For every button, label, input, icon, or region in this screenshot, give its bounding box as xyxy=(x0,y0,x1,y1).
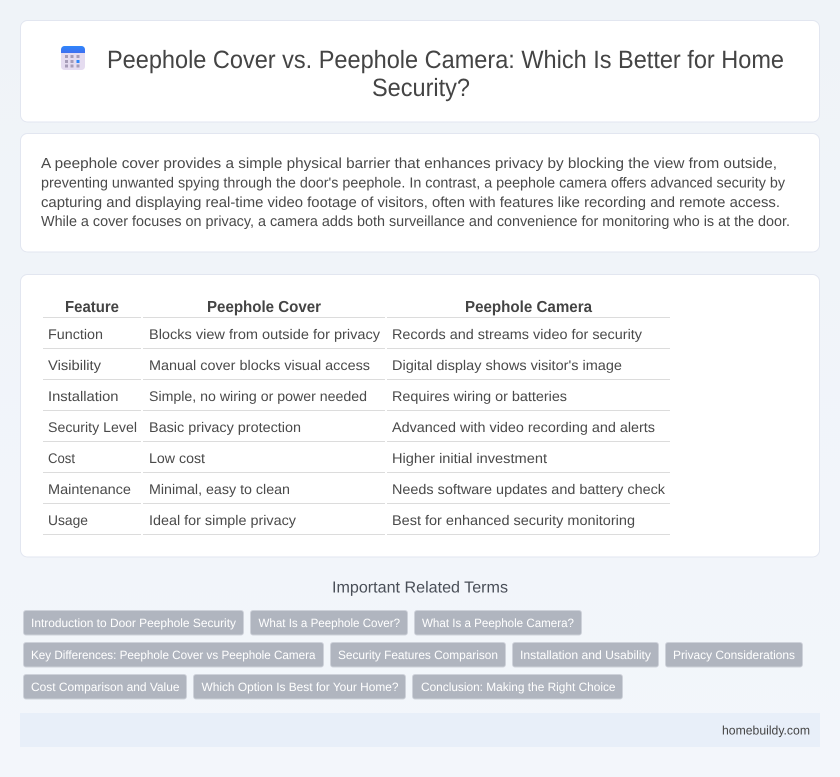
row: usage: Ideal for simple privacy xyxy=(149,512,296,528)
title xyxy=(107,46,784,102)
icon: calendar xyxy=(61,46,85,70)
panel: related term tags: Privacy Considerations xyxy=(673,648,795,662)
footer credit: homebuildy.com xyxy=(722,724,810,738)
panel: related term tags: Conclusion: Making the Right Choice xyxy=(421,680,616,694)
row: function: Blocks view from outside for privacy xyxy=(149,326,380,342)
panel: header xyxy=(20,20,820,122)
footer xyxy=(20,713,820,747)
panel: related term tags: What Is a Peephole Camera? xyxy=(422,616,574,630)
row: function xyxy=(48,326,642,342)
table header: Peephole Camera xyxy=(465,299,592,316)
text block: introduction: A peephole cover provides a simple physical barrier that enhances privacy by blocking the view from outside, xyxy=(41,156,777,172)
title: Peephole Cover vs. Peephole Camera: Which Is Better for Home xyxy=(107,46,784,74)
row: usage xyxy=(48,512,635,528)
row: usage: Usage xyxy=(48,512,88,528)
row: function: Function xyxy=(48,326,103,342)
row: cost: Low cost xyxy=(149,450,205,466)
row: visibility: Visibility xyxy=(48,357,101,373)
row: visibility xyxy=(48,357,622,373)
text block: introduction: While a cover focuses on privacy, a camera adds both surveillance and convenience for monitoring who is at the door. xyxy=(41,214,790,230)
text block: introduction xyxy=(41,156,790,230)
row: maintenance: Needs software updates and battery check xyxy=(392,481,666,497)
panel: comparison table xyxy=(20,274,820,557)
panel: related term tags: Introduction to Door Peephole Security xyxy=(31,616,236,630)
row: function: Records and streams video for security xyxy=(392,326,642,342)
text block: introduction: preventing unwanted spying through the door's peephole. In contrast, a peephole camera offers advanced security by xyxy=(41,176,786,192)
row: installation: Requires wiring or batteries xyxy=(392,388,567,404)
row: security level xyxy=(48,419,655,435)
table header: Feature xyxy=(65,299,119,316)
panel: related term tags: Key Differences: Peephole Cover vs Peephole Camera xyxy=(31,648,316,662)
row: installation: Installation xyxy=(48,388,118,404)
panel: related term tags: Security Features Comparison xyxy=(338,648,498,662)
title: Security? xyxy=(372,74,470,102)
row: cost: Cost xyxy=(48,450,75,466)
panel: related term tags: What Is a Peephole Cover? xyxy=(258,616,400,630)
table header xyxy=(65,299,592,316)
row: cost xyxy=(48,450,547,466)
row: visibility: Manual cover blocks visual access xyxy=(149,357,370,373)
row: usage: Best for enhanced security monitoring xyxy=(392,512,635,528)
table header: Peephole Cover xyxy=(207,299,321,316)
panel: introduction text xyxy=(20,134,820,252)
row: maintenance xyxy=(48,481,666,497)
panel: related term tags: Cost Comparison and Value xyxy=(31,680,180,694)
row: visibility: Digital display shows visitor's image xyxy=(392,357,622,373)
row: installation: Simple, no wiring or power needed xyxy=(149,388,367,404)
panel: related term tags: Which Option Is Best for Your Home? xyxy=(202,680,399,694)
row: security level: Security Level xyxy=(48,419,137,435)
row: security level: Basic privacy protection xyxy=(149,419,301,435)
row: maintenance: Maintenance xyxy=(48,481,131,497)
row: cost: Higher initial investment xyxy=(392,450,547,466)
panel: related term tags xyxy=(24,610,802,699)
row: installation xyxy=(48,388,567,404)
text block: introduction: capturing and displaying real-time video footage of visitors, often with features like recording and remote access. xyxy=(41,195,780,211)
heading: related terms: Important Related Terms xyxy=(332,580,508,596)
row: maintenance: Minimal, easy to clean xyxy=(149,481,290,497)
row: security level: Advanced with video recording and alerts xyxy=(392,419,655,435)
panel: related term tags: Installation and Usability xyxy=(520,648,651,662)
